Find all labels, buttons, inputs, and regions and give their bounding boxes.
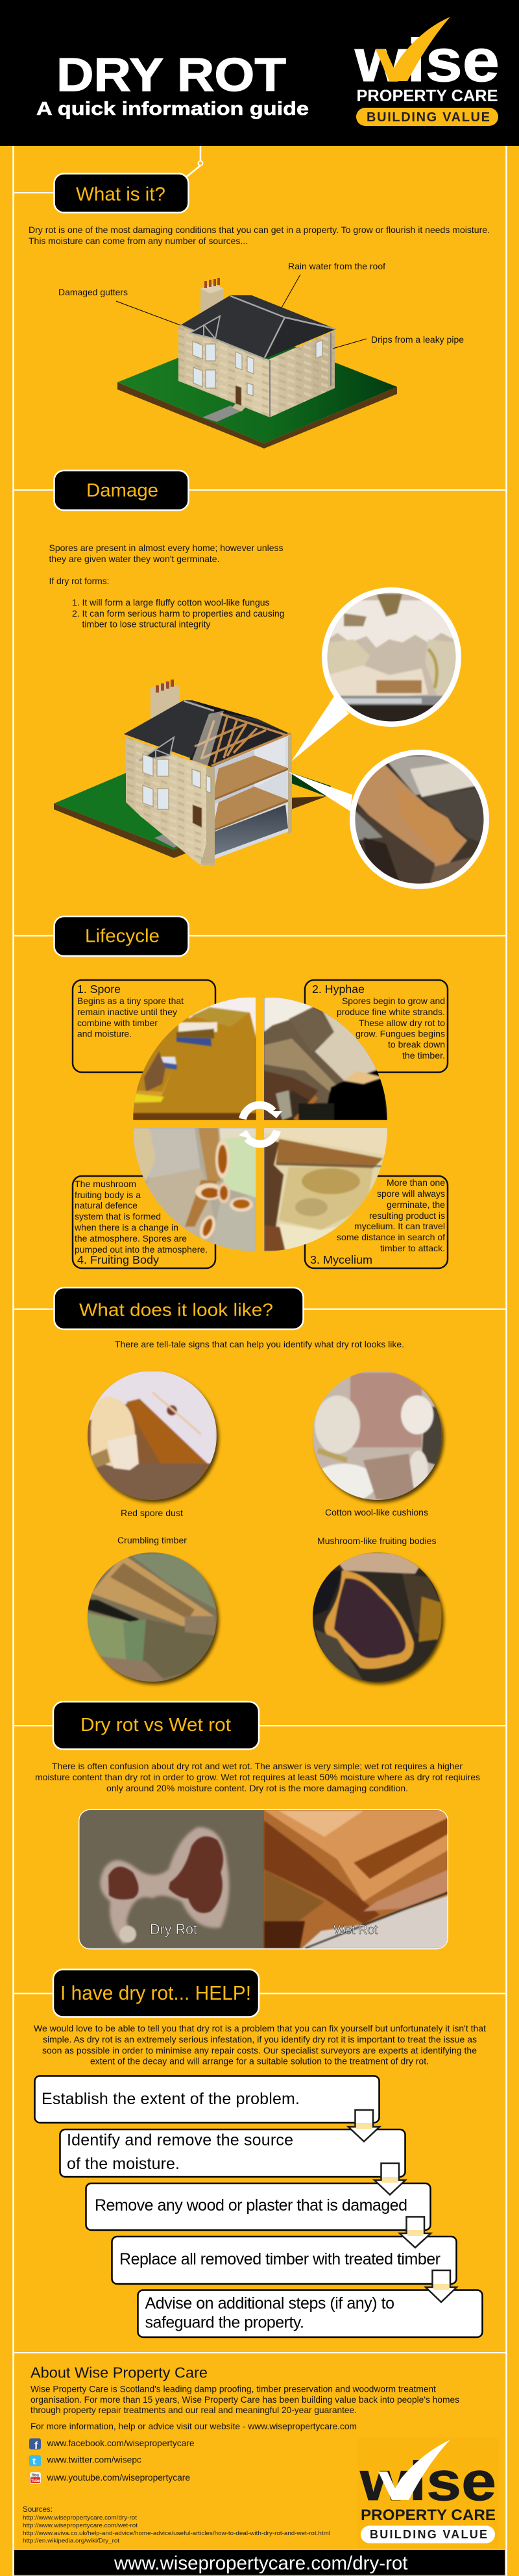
step 2: hyphae: 2. Hyphae	[312, 983, 365, 996]
step 4: fruiting body: fruiting body is a	[75, 1190, 141, 1200]
label: red spore dust: Red spore dust	[121, 1508, 183, 1518]
photo: crumbling timber	[84, 1551, 221, 1684]
youtube link: www.youtube.com/wisepropertycare	[47, 2472, 190, 2483]
logo: Wise Property Care (footer): BUILDING VALUE	[370, 2528, 487, 2541]
facebook link: www.facebook.com/wisepropertycare	[47, 2438, 195, 2448]
step 1: spore: combine with timber	[77, 1018, 158, 1028]
damage text: Spores are present in almost every home; however unless	[49, 543, 283, 553]
dry vs wet text: There is often confusion about dry rot and wet rot. The answer is very simple; wet rot requires a higher	[52, 1761, 463, 1771]
footer url bar	[14, 2550, 505, 2575]
damage text: timber to lose structural integrity	[82, 619, 210, 630]
sources: http://www.aviva.co.uk/help-and-advice/home-advice/useful-articles/how-to-deal-with-dry-rot-and-wet-rot.html	[23, 2530, 330, 2537]
logo: Wise Property Care (header): BUILDING VALUE	[367, 110, 490, 125]
look intro text: There are tell-tale signs that can help you identify what dry rot looks like.	[115, 1339, 404, 1349]
twitter link: www.twitter.com/wisepc	[47, 2455, 141, 2465]
icon: youtube: You	[32, 2474, 39, 2478]
step box 4: Replace all removed timber with treated timber	[119, 2250, 441, 2268]
damage text: If dry rot forms:	[49, 576, 109, 586]
heading: What does it look like?: What does it look like?	[79, 1299, 273, 1320]
step box 2	[60, 2129, 405, 2177]
about text	[30, 2383, 459, 2431]
step 2: hyphae: grow. Fungues begins	[356, 1028, 445, 1038]
heading: What does it look like?	[54, 1288, 304, 1329]
lifecycle photo: spore dust	[133, 997, 256, 1120]
step 4: fruiting body: system that is formed	[75, 1211, 161, 1221]
step 4: fruiting body: 4. Fruiting Body	[77, 1253, 159, 1266]
logo: Wise Property Care (header): PROPERTY CARE	[357, 87, 498, 105]
lifecycle photo: hyphae	[264, 997, 387, 1120]
step 1: spore: and moisture.	[77, 1028, 132, 1038]
step 4: fruiting body: the atmosphere. Spores are	[75, 1233, 187, 1244]
step box 1	[35, 2076, 379, 2122]
step box 3	[86, 2183, 431, 2230]
logo: Wise Property Care (header)	[354, 17, 500, 126]
step 1: spore	[77, 983, 184, 1038]
icon: facebook	[29, 2438, 41, 2451]
heading: Dry rot vs Wet rot: Dry rot vs Wet rot	[80, 1715, 231, 1736]
callout: damaged gutters	[58, 287, 180, 325]
dry vs wet text	[35, 1761, 480, 1793]
heading: Lifecycle: Lifecycle	[85, 926, 160, 947]
photo: cotton wool-like cushions	[311, 1369, 444, 1503]
help text: extent of the decay and will arrange for a suitable solution to the treatment of dry rot.	[90, 2056, 429, 2067]
help text	[34, 2023, 486, 2067]
icon: youtube	[30, 2472, 41, 2484]
step 2: hyphae: produce fine white strands.	[337, 1007, 445, 1017]
step 3: mycelium: germinate, the	[387, 1199, 445, 1210]
logo: Wise Property Care (footer): PROPERTY CARE	[361, 2507, 496, 2524]
help text: We would love to be able to tell you that dry rot is a problem that you can fix yourself but unfortunately it isn't that	[34, 2023, 486, 2033]
step 3: mycelium: 3. Mycelium	[310, 1253, 372, 1266]
sources: http://www.wisepropertycare.com/wet-rot	[23, 2522, 138, 2529]
heading: I have dry rot... HELP!: I have dry rot... HELP!	[60, 1981, 251, 2004]
heading: Damage	[54, 471, 188, 510]
about text: Wise Property Care is Scotland's leading damp proofing, timber preservation and woodworm treatment	[30, 2383, 436, 2394]
dry vs wet text: moisture content than dry rot in order to grow. Wet rot requires at least 50% moisture where as dry rot reqiuires	[35, 1772, 480, 1782]
house illustration	[117, 278, 397, 448]
step box 4	[112, 2237, 457, 2284]
callout: drips from a leaky pipe	[333, 334, 464, 349]
step 3: mycelium	[310, 1177, 445, 1266]
step 4: fruiting body: when there is a change in	[74, 1222, 178, 1233]
step 1: spore: remain inactive until they	[77, 1007, 177, 1017]
lifecycle step outlines	[73, 980, 448, 1268]
heading: Dry rot vs Wet rot	[53, 1702, 259, 1749]
step 2: hyphae: Spores begin to grow and	[342, 996, 445, 1006]
arrow: step 3 to 4	[400, 2217, 431, 2248]
lifecycle photo: fruiting body	[133, 1128, 256, 1251]
label: cotton wool-like cushions: Cotton wool-like cushions	[325, 1507, 428, 1517]
step box 2: Identify and remove the source	[67, 2131, 293, 2150]
sources	[23, 2505, 330, 2544]
photo: mushroom-like fruiting bodies	[311, 1551, 444, 1684]
step 3: mycelium: More than one	[387, 1177, 445, 1188]
title: DRY ROT	[56, 49, 286, 101]
photo: red spore dust	[84, 1369, 221, 1503]
step 3: mycelium: resulting product is	[369, 1210, 445, 1221]
intro text	[29, 225, 490, 246]
step box 3: Remove any wood or plaster that is damaged	[95, 2196, 407, 2214]
logo: Wise Property Care (footer): wise	[359, 2451, 496, 2512]
arrow: step 1 to 2	[348, 2110, 380, 2142]
callout: rain water from the roof	[282, 261, 385, 308]
comparison photo panel	[78, 1809, 449, 1950]
logo: Wise Property Care (header): wise	[354, 27, 500, 94]
step box 5	[138, 2290, 483, 2337]
damage text	[49, 543, 284, 630]
callout: fungus photo	[291, 587, 461, 761]
step box 5: Advise on additional steps (if any) to	[145, 2294, 394, 2312]
heading: Damage: Damage	[86, 480, 158, 501]
about heading: About Wise Property Care	[30, 2364, 208, 2381]
step 1: spore: Begins as a tiny spore that	[77, 996, 184, 1006]
step 4: fruiting body	[74, 1179, 208, 1266]
step 4: fruiting body: pumped out into the atmosphere.	[75, 1244, 208, 1255]
arrow: step 4 to 5	[426, 2270, 457, 2302]
step 2: hyphae: the timber.	[402, 1050, 445, 1061]
step 3: mycelium: timber to attack.	[380, 1243, 445, 1253]
damaged house cutaway illustration	[54, 680, 331, 866]
step 3: mycelium: some distance in search of	[337, 1232, 445, 1242]
icon: facebook: f	[34, 2440, 38, 2451]
step 3: mycelium: mycelium. It can travel	[354, 1221, 445, 1231]
about text: For more information, help or advice visit our website - www.wisepropertycare.com	[30, 2421, 357, 2431]
heading: Lifecycle	[54, 916, 188, 956]
icon: youtube: Tube	[31, 2479, 41, 2483]
step 2: hyphae	[312, 983, 445, 1061]
damage text: 1.	[72, 597, 80, 607]
step 2: hyphae: to break down	[388, 1039, 445, 1049]
lifecycle photo: mycelium	[264, 1128, 387, 1251]
step 2: hyphae: These allow dry rot to	[359, 1018, 445, 1028]
step box 2: of the moisture.	[67, 2155, 180, 2173]
intro text: Dry rot is one of the most damaging conditions that you can get in a property. To grow or flourish it needs moisture.	[29, 225, 490, 235]
step 1: spore: 1. Spore	[77, 983, 121, 996]
photo label: wet rot: Wet Rot	[333, 1923, 378, 1937]
sources: http://en.wikipedia.org/wiki/Dry_rot	[23, 2538, 119, 2544]
icon: twitter	[29, 2455, 41, 2467]
heading: I have dry rot... HELP!	[53, 1969, 259, 2017]
label: mushroom-like fruiting bodies: Mushroom-like fruiting bodies	[317, 1536, 436, 1546]
help text: soon as possible in order to minimise any repair costs. Our specialist surveyors are experts at identifying the	[42, 2045, 477, 2055]
about text: organisation. For more than 15 years, Wise Property Care has been building value back into people's homes	[30, 2394, 459, 2405]
step 4: fruiting body: natural defence	[75, 1200, 138, 1210]
heading: What is it?	[54, 174, 188, 213]
dry vs wet text: only around 20% moisture content. Dry rot is the more damaging condition.	[106, 1783, 408, 1793]
sources: Sources:	[23, 2505, 53, 2514]
step 4: fruiting body: The mushroom	[75, 1179, 136, 1189]
callout: drips from a leaky pipe: Drips from a leaky pipe	[371, 334, 464, 345]
label: crumbling timber: Crumbling timber	[117, 1535, 187, 1545]
callout: rain water from the roof: Rain water from the roof	[288, 261, 385, 271]
callout: damaged gutters: Damaged gutters	[58, 287, 128, 297]
step box 1: Establish the extent of the problem.	[42, 2090, 300, 2108]
callout: decayed timber photo	[288, 750, 489, 889]
help text: simple. As dry rot is an extremely serious infestation, if you identify dry rot it is important to treat the issue as	[43, 2034, 477, 2044]
heading: What is it?: What is it?	[76, 184, 165, 205]
damage text: It can form serious harm to properties and causing	[82, 608, 284, 619]
damage text: 2.	[72, 608, 80, 619]
damage text: It will form a large fluffy cotton wool-like fungus	[82, 597, 270, 607]
arrow: step 2 to 3	[374, 2163, 405, 2195]
intro text: This moisture can come from any number of sources...	[29, 236, 248, 246]
header band	[0, 0, 519, 146]
step 3: mycelium: spore will always	[377, 1188, 445, 1199]
lifecycle arrows	[239, 1105, 282, 1144]
footer url bar: www.wisepropertycare.com/dry-rot	[114, 2553, 408, 2574]
damage text: they are given water they won't germinate.	[49, 554, 219, 564]
about text: through property repair treatments and our real and meaningful 20-year guarantee.	[30, 2405, 357, 2415]
logo: Wise Property Care (footer)	[358, 2438, 498, 2548]
icon: twitter: t	[32, 2456, 36, 2467]
sources: http://www.wisepropertycare.com/dry-rot	[23, 2514, 137, 2521]
subtitle: A quick information guide	[36, 99, 309, 119]
photo label: dry rot: Dry Rot	[150, 1921, 197, 1937]
step box 5: safeguard the property.	[145, 2313, 304, 2331]
